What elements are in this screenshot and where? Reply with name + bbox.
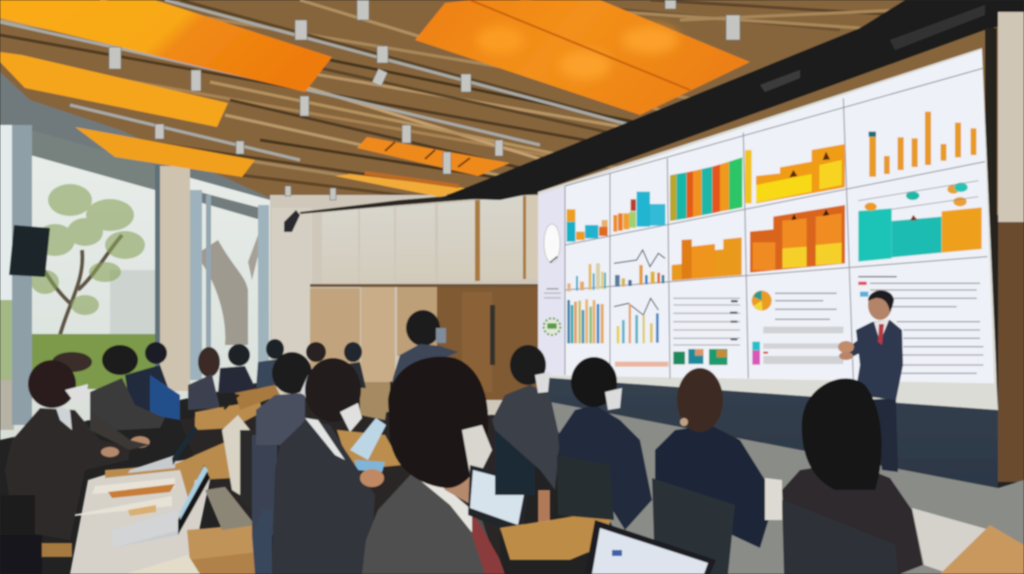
chart: panel r3c4 pie and notes — [752, 291, 843, 365]
chart: panel r2c1 small bars — [567, 263, 606, 291]
ceiling: grey soffit above windows — [0, 72, 272, 215]
seated man front centre — [362, 357, 505, 574]
screen frame — [538, 48, 998, 410]
chart: panel r3c1 tall bars — [567, 299, 604, 343]
track lights — [109, 0, 740, 200]
windows and trees — [0, 125, 270, 440]
seated woman front right with chair — [782, 378, 923, 574]
window frames — [12, 125, 32, 425]
ceiling projector — [284, 210, 300, 232]
seated man in grey suit — [492, 345, 560, 495]
ceiling: wood slats — [0, 0, 1024, 215]
floor — [540, 400, 1024, 574]
chair behind middle person — [252, 510, 272, 574]
back wall — [270, 188, 545, 415]
chart: panel r3c2 bars with line — [614, 298, 668, 367]
chart: panel r1c2 stepped blocks — [613, 192, 665, 232]
chart: panel r2c5 teal and orange blocks — [858, 181, 982, 262]
dark floor shadow under desks — [180, 380, 500, 574]
chart: panel r1c3 striped bars — [670, 157, 742, 221]
tree: left — [31, 184, 145, 335]
seated person middle left — [252, 352, 314, 535]
desks — [70, 385, 402, 574]
bags on desk — [205, 415, 256, 530]
ceiling light panels — [0, 0, 750, 197]
wall speaker — [9, 225, 50, 277]
left info column — [538, 186, 565, 375]
laptop in front of centre man — [468, 465, 530, 537]
chart: panel r2c2 bars with line — [614, 250, 665, 287]
wooden partition, centre front — [500, 510, 612, 560]
standing man at the back — [390, 310, 458, 400]
seated person front left — [5, 360, 150, 540]
laptop, front centre — [585, 520, 716, 574]
table: panel r3c3 — [673, 298, 740, 365]
screen grid lines — [565, 68, 987, 380]
presenter — [838, 290, 903, 472]
laptop, middle with tablet — [350, 418, 386, 472]
back-row audience — [52, 339, 390, 430]
tree: right trunk — [195, 235, 262, 345]
seated woman with chair — [652, 368, 770, 574]
chart: panel r1c1 stacked bars — [567, 209, 608, 242]
laptops, left desk — [112, 394, 240, 548]
chart: panel r2c4 orange stacked blocks — [750, 205, 845, 273]
wall below the screen — [540, 375, 998, 488]
hedge — [22, 334, 157, 389]
right wall and pillar — [985, 12, 1024, 482]
text block: panel r3c5 — [858, 277, 983, 373]
chart: panel r1c4 yellow steps — [745, 144, 845, 203]
seated person in dark suit — [272, 358, 384, 574]
black chairs front left — [0, 495, 72, 574]
glass on table — [538, 490, 550, 522]
chart: panel r1c5 orange bars — [869, 112, 976, 177]
papers and orange folders on desk — [72, 478, 175, 516]
table, front right — [765, 478, 1024, 574]
column — [160, 166, 190, 391]
black ceiling beam — [440, 0, 1024, 200]
seated man in navy suit with chair — [557, 357, 652, 530]
chart: panel r2c3 stepped orange — [672, 237, 742, 281]
projection screen — [538, 50, 994, 383]
